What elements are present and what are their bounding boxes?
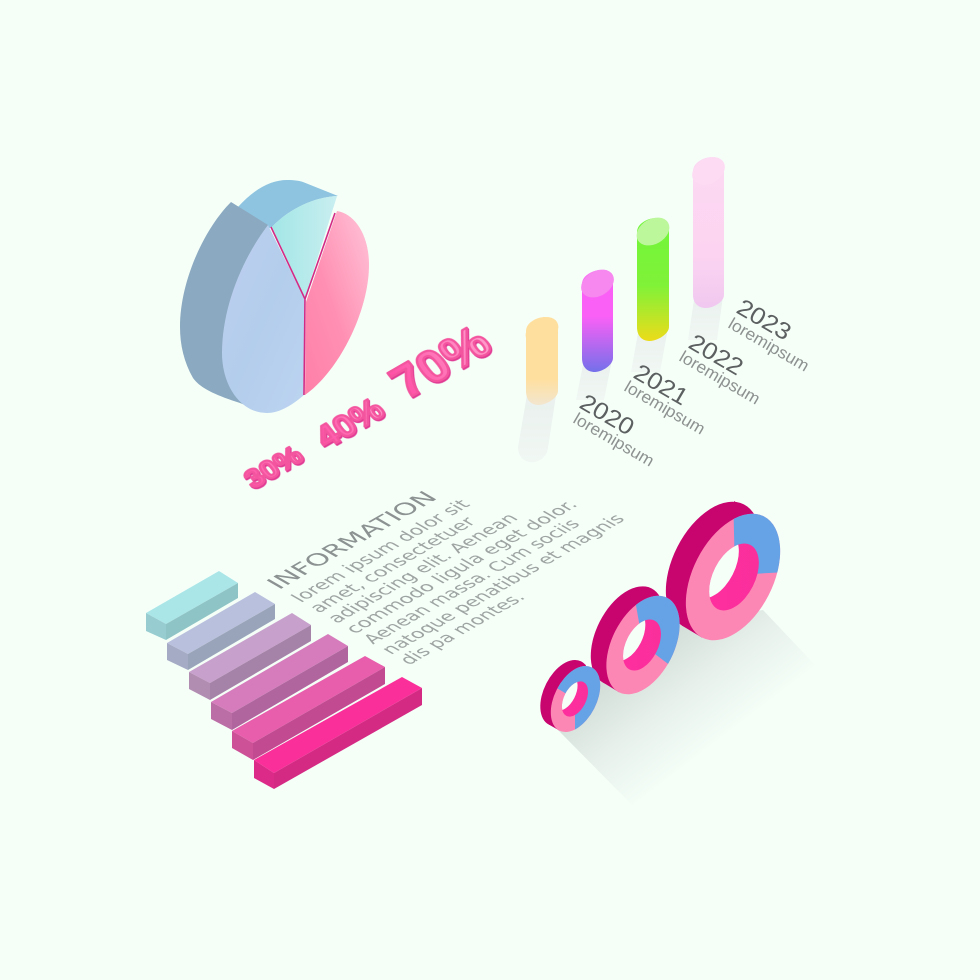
bar 2: [167, 592, 275, 670]
bar 5: [232, 656, 385, 760]
label 40%: 40%: [308, 392, 391, 455]
donut chart: medium: [590, 586, 680, 694]
cylinder 2022: [632, 212, 674, 341]
bar 3: [189, 613, 311, 700]
pie: top blue slice rim: [238, 180, 338, 229]
large donut hole: [709, 544, 759, 610]
cylinder 2020: [521, 311, 563, 405]
year labels: [570, 294, 812, 470]
label 2021: 2021: [629, 359, 693, 411]
information paragraph: amet, consectetuer: [305, 514, 481, 616]
information heading: INFORMATION: [262, 488, 444, 593]
information paragraph: commodo ligula eget dolor.: [341, 497, 583, 637]
donut long shadow: [558, 610, 815, 805]
information paragraph: dis pa montes.: [395, 590, 530, 668]
label 2021: loremipsum: [621, 377, 708, 438]
small donut hole: [562, 681, 588, 717]
label 2023: loremipsum: [725, 314, 812, 375]
cylinder 2021: [576, 264, 619, 372]
bar 4: [211, 634, 348, 730]
donut chart: small: [540, 660, 600, 732]
medium donut blue segment: [636, 596, 680, 664]
label 30%: 30%: [238, 440, 309, 494]
small donut face: [541, 658, 610, 740]
information paragraph: [287, 459, 648, 668]
bar 1: [146, 571, 238, 640]
medium donut rim: [576, 574, 679, 697]
pie: large pale blue slice: [222, 225, 305, 413]
stepped isometric bars: [146, 571, 422, 789]
small donut blue segment: [558, 666, 600, 730]
label 2020: loremipsum: [570, 409, 657, 470]
label 2020: 2020: [575, 389, 639, 441]
cylinder shadows: [518, 296, 723, 462]
infographic canvas: [146, 157, 808, 789]
small donut rim: [530, 652, 600, 734]
large donut rim: [646, 486, 780, 644]
label 2022: 2022: [684, 329, 748, 381]
pie: teal slice: [272, 196, 337, 298]
label 70%: 70%: [380, 316, 501, 408]
pie: slice separators: [271, 213, 335, 395]
cylinder 2023: [687, 151, 730, 308]
large donut face: [666, 498, 800, 656]
donut chart: large: [666, 501, 780, 640]
information paragraph: adipiscing elit. Aenean: [323, 511, 523, 626]
pie: side rim: [180, 202, 268, 412]
label 2023: 2023: [732, 294, 796, 346]
medium donut face: [591, 584, 695, 706]
medium donut hole: [623, 620, 661, 670]
pie chart: [180, 180, 369, 413]
cylinder bar chart: [518, 151, 730, 462]
information paragraph: lorem ipsum dolor sit: [287, 497, 475, 606]
information paragraph: Aenean massa. Cum sociis: [359, 517, 585, 647]
information paragraph: natoque penatibus et magnis: [377, 511, 630, 658]
label 2022: loremipsum: [676, 347, 763, 408]
percentage labels: [238, 316, 501, 494]
large donut blue segment: [734, 514, 780, 574]
bar 6: [254, 677, 422, 789]
pie: pink slice: [305, 211, 369, 395]
